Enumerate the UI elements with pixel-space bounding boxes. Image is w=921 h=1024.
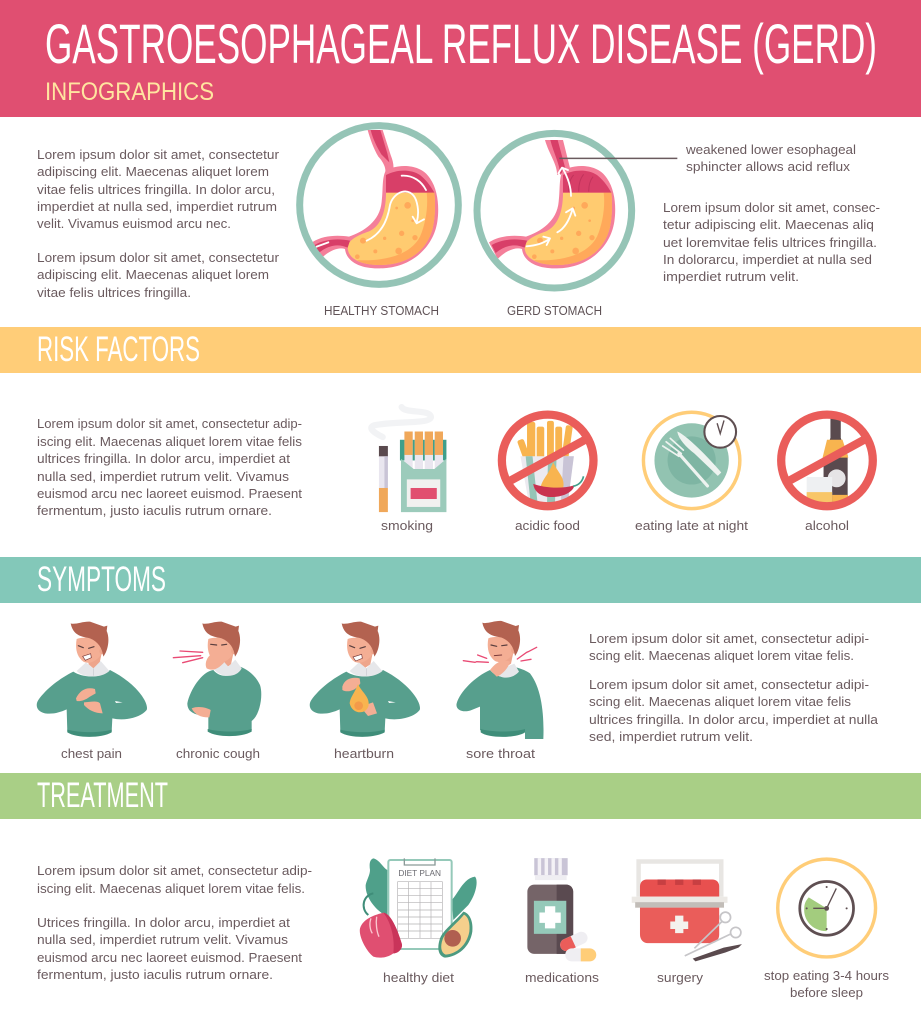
treatment icons: [527, 858, 876, 961]
intro text right: imperdiet rutrum velit.: [663, 269, 799, 284]
symptom figure: chronic cough: [173, 622, 261, 736]
intro text right: [663, 200, 880, 284]
intro text left: adipiscing elit. Maecenas aliquet lorem: [37, 164, 269, 179]
stomach captions: HEALTHY STOMACH: [324, 303, 439, 318]
risk text: [37, 416, 303, 518]
symptoms band: [0, 557, 921, 603]
risk labels: alcohol: [805, 518, 849, 533]
intro text left: vitae felis ultrices fringilla.: [37, 285, 191, 300]
intro text left: velit. Vivamus euismod arcu nec.: [37, 216, 231, 231]
risk text: ultrices fringilla. In dolor arcu, imperdiet at: [37, 451, 290, 466]
symptoms text: ultrices fringilla. In dolor arcu, imperdiet at nulla: [589, 712, 879, 727]
callout: weakened lower esophageal: [685, 142, 856, 157]
icon: medications: [527, 858, 596, 961]
treatment labels: surgery: [657, 970, 704, 985]
symptom labels: sore throat: [466, 746, 535, 761]
risk labels: acidic food: [515, 518, 580, 533]
treatment text: nulla sed, imperdiet rutrum velit. Vivamus: [37, 932, 289, 947]
ring GERD: [477, 133, 632, 288]
esophagus GERD: [545, 140, 570, 175]
healthy stomach diagram: [300, 126, 458, 284]
callout: [685, 142, 856, 174]
treatment text: [37, 863, 312, 982]
intro text right: Lorem ipsum dolor sit amet, consec-: [663, 200, 880, 215]
icon: acidic food: [502, 415, 593, 506]
risk labels: smoking: [381, 518, 433, 533]
treatment text: Utrices fringilla. In dolor arcu, imperdiet at: [37, 915, 290, 930]
arrows healthy: [317, 176, 426, 247]
treatment labels: healthy diet: [383, 970, 454, 985]
symptom figure: chest pain: [37, 622, 147, 737]
symptom labels: chest pain: [61, 746, 122, 761]
ring healthy: [300, 126, 458, 284]
symptoms text: scing elit. Maecenas aliquet lorem vitae felis.: [589, 648, 854, 663]
esophagus healthy: [368, 130, 394, 172]
risk icons: [371, 407, 873, 512]
risk text: nulla sed, imperdiet rutrum velit. Vivamus: [37, 469, 290, 484]
icon: smoking: [371, 407, 446, 512]
symptoms text: sed, imperdiet rutrum velit.: [589, 729, 753, 744]
icon: alcohol: [781, 415, 873, 506]
stomach captions: [324, 303, 602, 318]
symptom labels: chronic cough: [176, 746, 260, 761]
risk text: euismod arcu nec laoreet euismod. Praesent: [37, 486, 302, 501]
symptoms text: Lorem ipsum dolor sit amet, consectetur adipi-: [589, 677, 869, 692]
header band: [0, 0, 921, 117]
icon: healthy diet: [360, 858, 477, 958]
symptoms text: scing elit. Maecenas aliquet lorem vitae felis: [589, 694, 852, 709]
treatment labels: medications: [525, 970, 600, 985]
treatment labels: [383, 968, 890, 1000]
intro text left: vitae felis ultrices fringilla. In dolor arcu,: [37, 182, 275, 197]
icon: healthy diet: DIET PLAN: [398, 869, 441, 878]
symptoms text: Lorem ipsum dolor sit amet, consectetur adipi-: [589, 631, 869, 646]
intro text left: [37, 147, 280, 300]
risk text: fermentum, justo iaculis rutrum ornare.: [37, 503, 272, 518]
intro text left: imperdiet at nulla sed, imperdiet rutrum: [37, 199, 277, 214]
risk labels: eating late at night: [635, 518, 748, 533]
intro text left: Lorem ipsum dolor sit amet, consectetur: [37, 147, 280, 162]
striations: [569, 174, 593, 192]
symptom figure: sore throat: [456, 621, 544, 739]
GERD stomach diagram: [477, 133, 677, 288]
pointer line: [559, 156, 677, 161]
arrows GERD: [527, 168, 575, 246]
icon: eating late at night: [643, 412, 740, 509]
risk text: Lorem ipsum dolor sit amet, consectetur adip-: [37, 416, 302, 431]
intro text left: adipiscing elit. Maecenas aliquet lorem: [37, 267, 269, 282]
intro text right: In dolorarcu, imperdiet at nulla sed: [663, 252, 872, 267]
treatment band: [0, 773, 921, 819]
treatment text: euismod arcu nec laoreet euismod. Praesent: [37, 950, 302, 965]
risk text: iscing elit. Maecenas aliquet lorem vitae felis: [37, 434, 303, 449]
symptoms heading: SYMPTOMS: [37, 560, 166, 599]
symptom labels: [61, 746, 535, 761]
intro text right: tetur adipiscing elit. Maecenas aliq: [663, 217, 874, 232]
subtitle: INFOGRAPHICS: [45, 78, 214, 106]
intro text right: uet loremvitae felis ultrices fringilla.: [663, 235, 877, 250]
treatment text: iscing elit. Maecenas aliquet lorem vitae felis.: [37, 881, 305, 896]
stomach captions: GERD STOMACH: [507, 303, 602, 318]
symptom labels: heartburn: [334, 746, 394, 761]
risk factors band: [0, 327, 921, 373]
treatment labels: stop eating 3-4 hours: [764, 968, 890, 983]
symptom figure: heartburn: [310, 622, 420, 737]
symptoms text: [589, 631, 879, 744]
callout: sphincter allows acid reflux: [686, 159, 851, 174]
risk labels: [381, 518, 849, 533]
treatment text: Lorem ipsum dolor sit amet, consectetur adip-: [37, 863, 312, 878]
icon: surgery: [632, 862, 742, 961]
treatment heading: TREATMENT: [37, 776, 168, 815]
treatment labels: before sleep: [790, 985, 863, 1000]
icon: stop eating clock: [778, 859, 876, 957]
risk factors heading: RISK FACTORS: [37, 330, 200, 369]
intro text left: Lorem ipsum dolor sit amet, consectetur: [37, 250, 280, 265]
treatment text: fermentum, justo iaculis rutrum ornare.: [37, 967, 273, 982]
